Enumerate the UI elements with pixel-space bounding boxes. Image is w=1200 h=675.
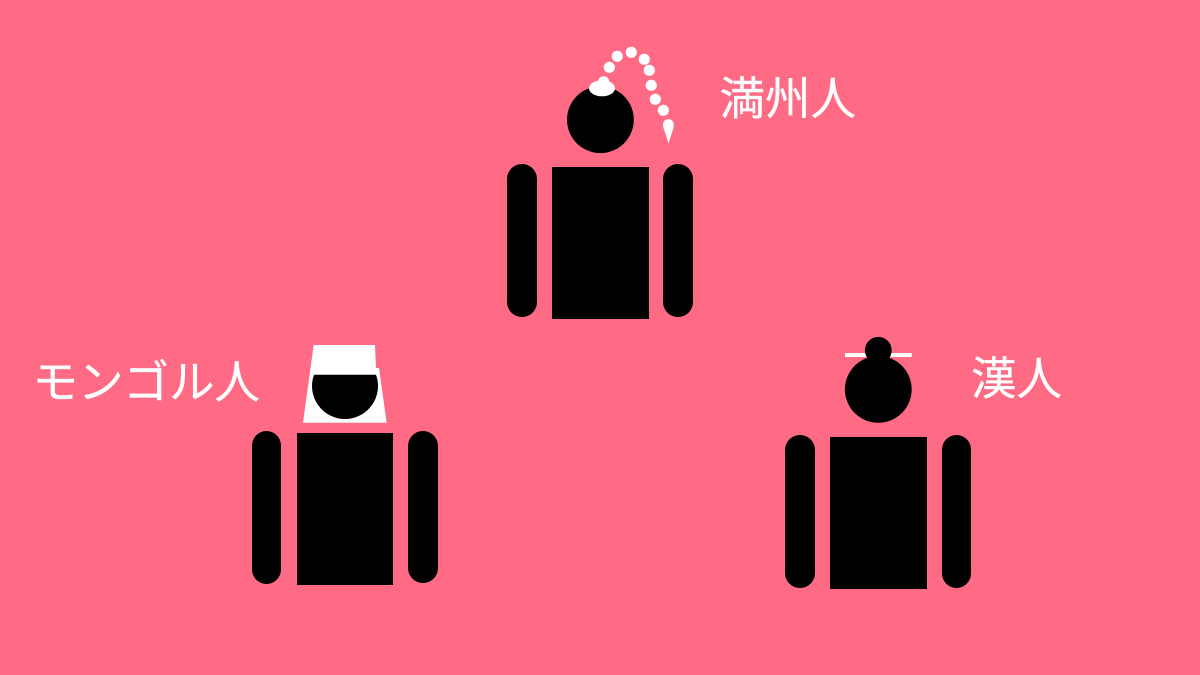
label: Mongol: モンゴル人 — [32, 357, 260, 408]
queue braid — [604, 47, 674, 144]
right arm — [942, 435, 971, 588]
figure: Han person — [785, 337, 971, 589]
left arm — [507, 164, 537, 317]
hair bun — [865, 337, 892, 364]
right arm — [663, 164, 693, 317]
shaved crown hair — [589, 76, 615, 96]
label: Han: 漢人 — [971, 354, 1062, 404]
head — [845, 356, 912, 423]
hairpin — [845, 353, 912, 357]
right arm — [408, 431, 438, 583]
left arm — [785, 435, 815, 588]
torso — [552, 167, 649, 319]
head — [567, 86, 634, 153]
figure: Mongol person — [252, 345, 438, 585]
hat — [303, 345, 387, 423]
figure: Manchu person — [507, 47, 693, 319]
torso — [297, 433, 393, 585]
label: Manchu: 満州人 — [720, 74, 856, 124]
head — [312, 375, 378, 419]
torso — [830, 437, 927, 589]
left arm — [252, 431, 281, 584]
